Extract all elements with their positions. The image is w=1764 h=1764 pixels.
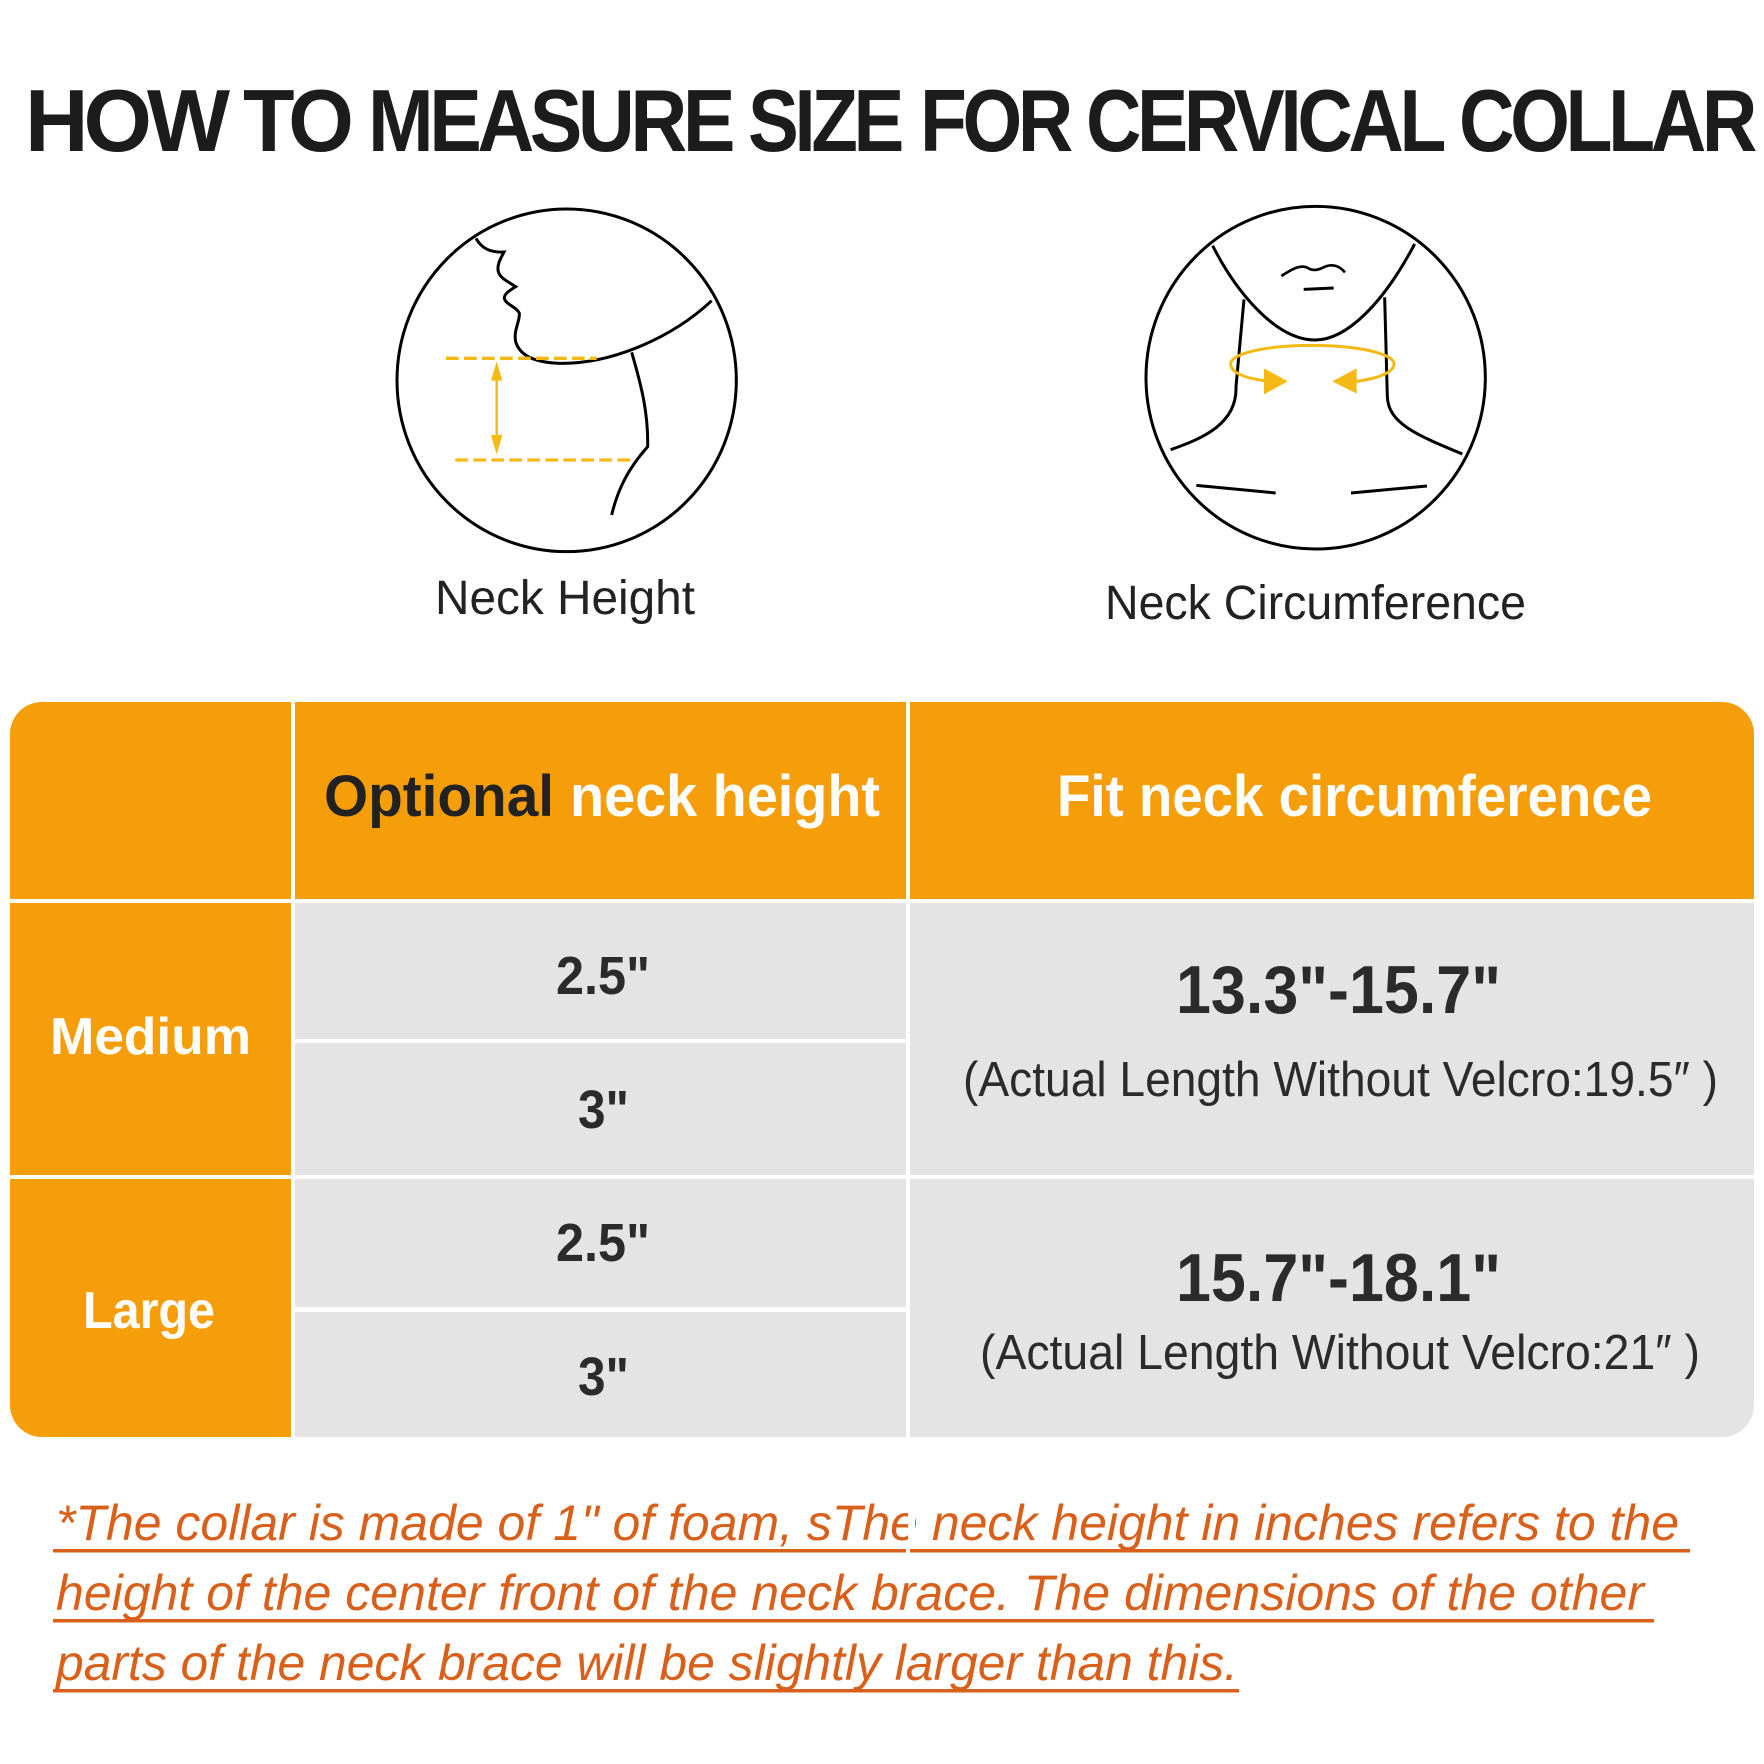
large height 2.5: 2.5"	[556, 1213, 650, 1273]
large circumference: 15.7"-18.1"	[1176, 1240, 1501, 1316]
medium actual length: (Actual Length Without Velcro:19.5″ )	[963, 1053, 1718, 1107]
title: SIZE	[748, 71, 902, 170]
label: neck circumference: Neck Circumference	[1105, 577, 1526, 630]
icon: neck height diagram	[397, 209, 736, 552]
title: CERVICAL	[1086, 71, 1445, 170]
header: optional neck height: neck height	[570, 764, 880, 829]
icon: neck circumference diagram	[1146, 206, 1485, 549]
header: fit neck circumference: Fit neck circumference	[1057, 764, 1652, 829]
title: FOR	[920, 71, 1072, 170]
size table	[10, 702, 1754, 1437]
footnote	[53, 1490, 1690, 1692]
medium circumference: 13.3"-15.7"	[1176, 952, 1501, 1028]
title: HOW	[25, 71, 230, 170]
footnote: parts of the neck brace will be slightly larger than this.	[54, 1635, 1238, 1691]
title: MEASURE	[368, 71, 733, 170]
row label: medium: Medium	[50, 1008, 251, 1066]
footnote: *The collar is made of 1" of foam, sThe neck height in inches refers to the	[56, 1495, 1679, 1551]
large actual length: (Actual Length Without Velcro:21″ )	[980, 1326, 1700, 1380]
row label: large: Large	[83, 1282, 215, 1340]
header: optional neck height	[324, 764, 880, 829]
title	[25, 71, 1756, 170]
medium height 2.5: 2.5"	[556, 946, 650, 1006]
label: neck height: Neck Height	[435, 572, 695, 625]
large height 3: 3"	[578, 1347, 629, 1407]
medium height 3: 3"	[578, 1080, 629, 1140]
header: optional neck height: Optional	[324, 764, 554, 829]
title: TO	[243, 71, 350, 170]
footnote: height of the center front of the neck brace. The dimensions of the other	[56, 1565, 1646, 1621]
